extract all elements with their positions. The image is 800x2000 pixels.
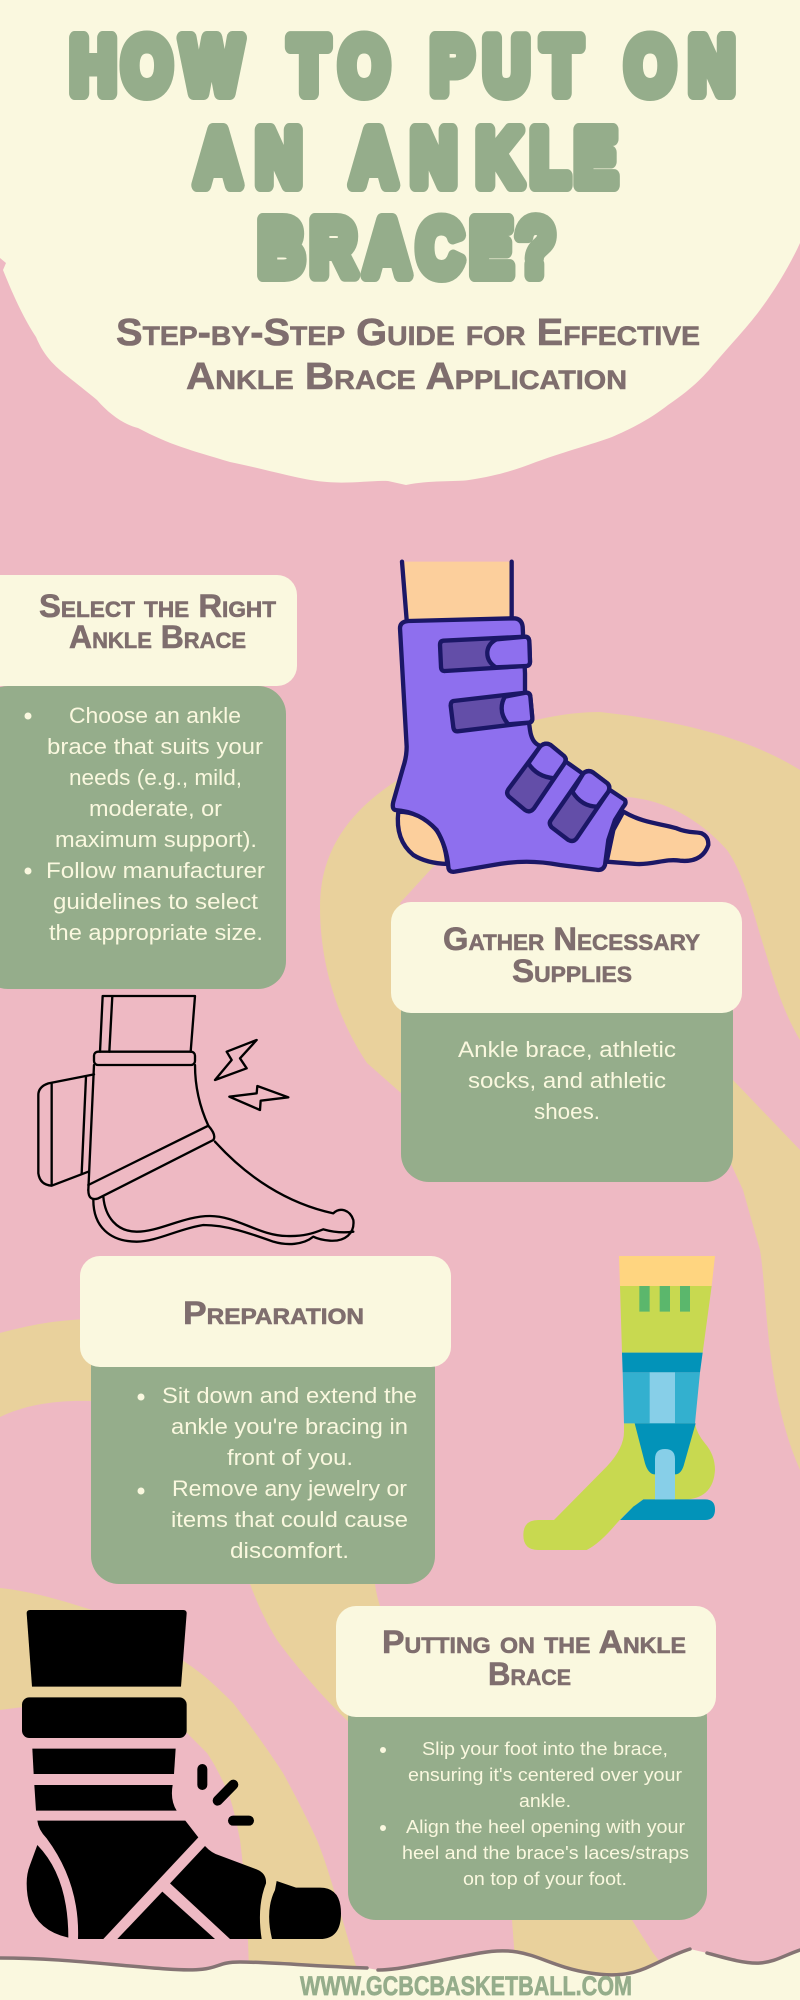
- icon: purple ankle brace: [393, 562, 708, 872]
- panel: preparation: [80, 1256, 451, 1584]
- panel: putting on the ankle brace: ensuring it's centered over your: [408, 1764, 682, 1785]
- panel: preparation: front of you.: [227, 1445, 353, 1470]
- panel: select the right ankle brace: needs (e.g., mild,: [69, 765, 242, 790]
- subtitle: [116, 312, 700, 398]
- panel: preparation: items that could cause: [171, 1507, 408, 1532]
- header blob: [0, 0, 800, 485]
- panel: gather necessary supplies: Gather Necessary: [443, 921, 700, 957]
- panel: gather necessary supplies: Supplies: [512, 953, 632, 989]
- panel: putting on the ankle brace: heel and the brace's laces/straps: [402, 1842, 689, 1863]
- icon: outline foot with brace and pain bolts: [38, 996, 354, 1244]
- panel: putting on the ankle brace: on top of your foot.: [463, 1868, 627, 1889]
- subtitle: Ankle Brace Application: [186, 356, 627, 398]
- panel: preparation: discomfort.: [230, 1538, 349, 1563]
- panel: putting on the ankle brace: [336, 1606, 716, 1920]
- title: HOW TO PUT ON: [70, 22, 735, 111]
- footer band: [0, 1949, 800, 2000]
- panel: preparation: Remove any jewelry or: [172, 1476, 407, 1501]
- panel: gather necessary supplies: shoes.: [534, 1099, 600, 1124]
- panel: select the right ankle brace: Ankle Brace: [69, 619, 246, 655]
- icon: green and blue prosthetic sock: [523, 1256, 715, 1550]
- panel: select the right ankle brace: Choose an ankle: [69, 703, 241, 728]
- panel: select the right ankle brace: brace that suits your: [47, 734, 263, 759]
- panel: gather necessary supplies: [391, 902, 742, 1182]
- title: AN ANKLE: [195, 114, 617, 203]
- title: BRACE?: [258, 204, 555, 293]
- panel: preparation: ankle you're bracing in: [171, 1414, 408, 1439]
- panel: select the right ankle brace: [0, 575, 297, 989]
- panel: select the right ankle brace: maximum support).: [55, 827, 257, 852]
- panel: gather necessary supplies: socks, and athletic: [468, 1068, 666, 1093]
- title: [70, 22, 735, 293]
- subtitle: Step-by-Step Guide for Effective: [116, 312, 700, 354]
- panel: select the right ankle brace: Follow manufacturer: [46, 858, 265, 883]
- panel: putting on the ankle brace: Align the heel opening with your: [406, 1816, 685, 1837]
- panel: putting on the ankle brace: ankle.: [519, 1790, 571, 1811]
- background: tan ribbon shapes: [0, 712, 800, 2000]
- panel: gather necessary supplies: Ankle brace, athletic: [458, 1037, 676, 1062]
- icon: black ankle wrap silhouette: [22, 1610, 341, 1939]
- panel: putting on the ankle brace: Putting on the Ankle: [382, 1624, 686, 1660]
- panel: preparation: Sit down and extend the: [162, 1383, 417, 1408]
- panel: preparation: Preparation: [183, 1295, 364, 1331]
- panel: select the right ankle brace: the appropriate size.: [49, 920, 263, 945]
- panel: select the right ankle brace: guidelines to select: [53, 889, 258, 914]
- panel: putting on the ankle brace: Brace: [488, 1656, 571, 1692]
- panel: putting on the ankle brace: Slip your foot into the brace,: [422, 1738, 668, 1759]
- panel: select the right ankle brace: Select the Right: [39, 588, 277, 624]
- panel: select the right ankle brace: moderate, or: [89, 796, 222, 821]
